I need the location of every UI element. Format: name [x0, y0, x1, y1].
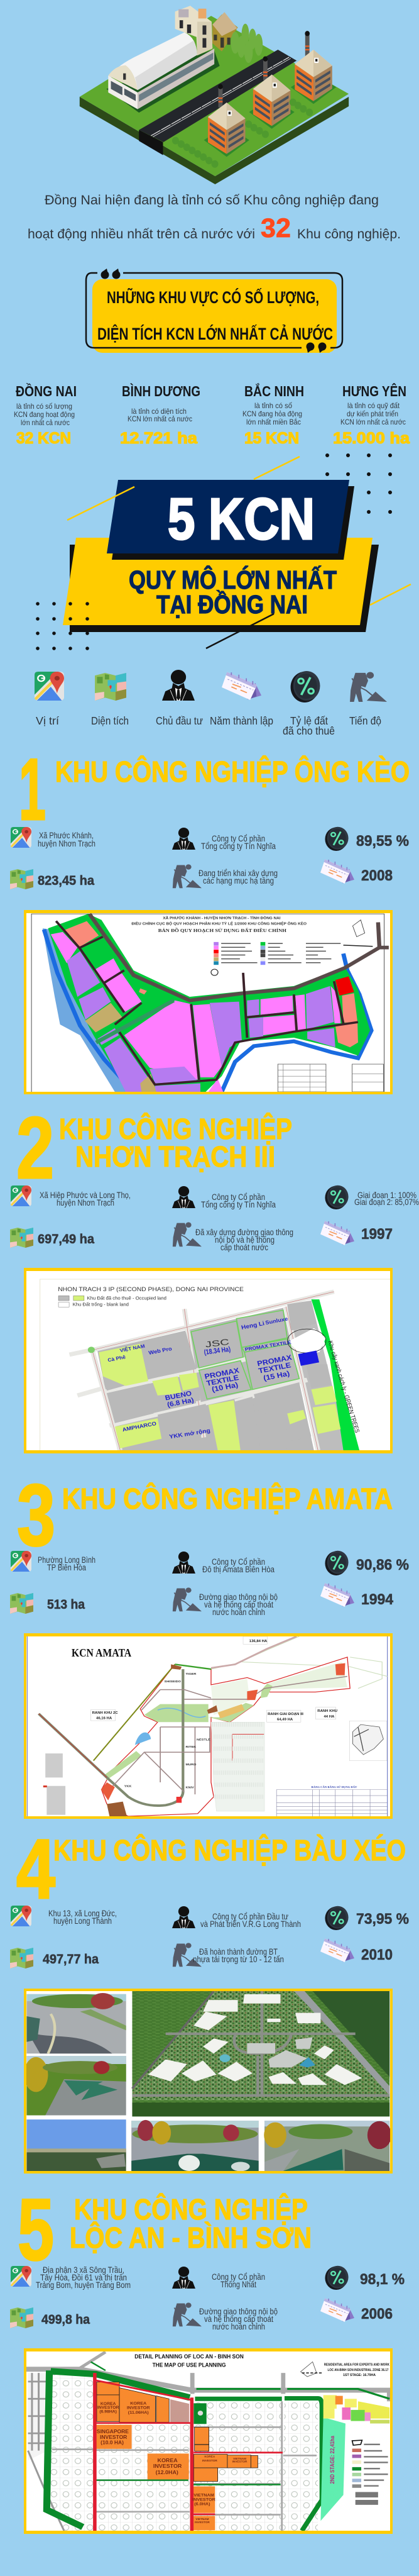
map: Nhơn Trạch 3 planning: Khu Đất đã cho thuê - Occupied land	[87, 1296, 166, 1301]
map: Amata planning	[24, 1633, 393, 1819]
section 2 heading	[16, 1099, 292, 1197]
section 2 heading: 2	[16, 1099, 54, 1197]
map: Lộc An - Bình Sơn planning: INVESTOR	[192, 2498, 215, 2502]
section 5 facts: Đường giao thông nội bộ	[199, 2307, 278, 2316]
stat: Hưng Yên: KCN lớn nhất cả nước	[340, 418, 406, 426]
stat: Bình Dương: là tỉnh có diện tích	[131, 407, 187, 416]
map: Nhơn Trạch 3 planning: PROMAX	[204, 1366, 240, 1381]
section 5 facts: Thống Nhất	[220, 2280, 256, 2289]
section 3 facts: 513 ha	[47, 1597, 85, 1612]
map: Amata planning: TIGER	[186, 1672, 197, 1676]
section 3 facts: và hệ thống cấp thoát	[204, 1600, 273, 1609]
map: Lộc An - Bình Sơn planning: DETAIL PLANNING OF LOC AN - BINH SON	[134, 2353, 244, 2360]
small renders	[24, 1993, 391, 2171]
map: Lộc An - Bình Sơn planning	[24, 2348, 393, 2534]
section 5 heading	[18, 2181, 312, 2279]
map: Lộc An - Bình Sơn planning: (11.06HA)	[128, 2411, 149, 2415]
section 2 facts: Đã xây dựng đường giao thông	[195, 1228, 293, 1237]
map: Nhơn Trạch 3 planning: (10 Ha)	[211, 1380, 239, 1394]
map: Nhơn Trạch 3 planning: PROMAX	[256, 1353, 293, 1368]
section 2 facts: Tổng công ty Tín Nghĩa	[201, 1200, 276, 1209]
section 3 heading	[17, 1467, 393, 1564]
intro text: Đồng Nai hiện đang là tỉnh có số Khu công nghiệp đang	[45, 193, 379, 208]
map: Amata planning: KNIV	[186, 1786, 194, 1789]
map: Amata planning: KCN AMATA	[72, 1647, 132, 1660]
map: Amata planning: RANH GIAI ĐOẠN III	[268, 1713, 303, 1716]
section 1 facts: 89,55 %	[356, 833, 409, 850]
section 2 facts: Công ty Cổ phần	[212, 1192, 265, 1202]
stat: Hưng Yên	[333, 382, 410, 447]
stat: Đồng Nai: KCN đang hoạt động	[14, 410, 75, 419]
legend: icons and labels: Chủ đầu tư	[156, 714, 203, 727]
map: Nhơn Trạch 3 planning: BUENO	[165, 1390, 193, 1402]
map: Amata planning: 44 HA	[324, 1715, 334, 1719]
section 5 facts: nước hoàn chỉnh	[212, 2322, 265, 2331]
section 3 heading: 3	[17, 1467, 55, 1564]
section 2 heading: NHƠN TRẠCH III	[75, 1140, 275, 1173]
map: Lộc An - Bình Sơn planning: (6.0HA)	[194, 2502, 210, 2507]
section 4 heading	[16, 1823, 406, 1916]
section 3 facts: Đô thị Amata Biên Hòa	[202, 1565, 275, 1574]
map: Lộc An - Bình Sơn planning: INVESTOR	[127, 2406, 150, 2411]
section 4 facts: Khu 13, xã Long Đức,	[48, 1909, 117, 1918]
map: Lộc An - Bình Sơn planning: VIETNAM	[233, 2457, 246, 2460]
section 3 facts: 90,86 %	[356, 1557, 409, 1574]
legend: icons and labels: Tiến độ	[349, 714, 381, 727]
map: Lộc An - Bình Sơn planning: 1ST STAGE: 16.79HA	[343, 2373, 376, 2377]
map: Lộc An - Bình Sơn planning: VIETNAM	[193, 2494, 214, 2497]
banner: 5 KCN quy mô lớn nhất: QUY MÔ LỚN NHẤT	[129, 565, 337, 594]
stat: Bắc Ninh: lớn nhất miền Bắc	[246, 417, 301, 426]
main aerial render	[132, 1991, 389, 2116]
map: Amata planning: YKK	[124, 1785, 132, 1789]
section 4 facts: huyện Long Thành	[53, 1916, 112, 1926]
map: Nhơn Trạch 3 planning: Khu cây xanh cách ly - GREEN TREES	[326, 1340, 361, 1434]
section 2 facts: huyện Nhơn Trạch	[57, 1198, 114, 1208]
map: Lộc An - Bình Sơn planning: (10.0 HA)	[101, 2440, 124, 2445]
section 2 facts: 1997	[361, 1226, 393, 1243]
map: Nhơn Trạch 3 planning: TEXTILE	[205, 1374, 239, 1387]
map: Lộc An - Bình Sơn planning: 2ND STAGE: 22,41ha	[329, 2435, 335, 2484]
section 2 facts: nội bộ và hệ thống	[215, 1235, 275, 1245]
section 4 heading: 4	[16, 1823, 55, 1916]
map: Nhơn Trạch 3 planning: Sunluxe	[264, 1316, 288, 1326]
map: Amata planning: BẢNG CÂN BẰNG SỬ DỤNG ĐẤT	[312, 1785, 357, 1789]
legend: icons and labels: Năm thành lập	[210, 714, 273, 727]
map: Lộc An - Bình Sơn planning: KOREA	[130, 2402, 146, 2406]
section 4 facts: và Phát triển V.R.G Long Thành	[200, 1919, 301, 1929]
map: Amata planning: RANH KHU	[317, 1709, 337, 1713]
callout: regions heading: DIỆN TÍCH KCN LỚN NHẤT CẢ NƯỚC	[97, 323, 333, 343]
map: Lộc An - Bình Sơn planning: INVESTOR	[232, 2460, 248, 2463]
stat: Hưng Yên: 15.000 ha	[333, 430, 410, 447]
section 1 facts: 823,45 ha	[38, 874, 94, 888]
section 1 facts: huyện Nhơn Trạch	[38, 839, 95, 848]
stat: Đồng Nai: ĐỒNG NAI	[16, 382, 77, 399]
map: Nhơn Trạch 3 planning: TEXTILE	[258, 1361, 291, 1375]
section 2 facts	[10, 1185, 419, 1252]
map: Nhơn Trạch 3 planning: VIỆT NAM	[119, 1343, 146, 1353]
intro text: Khu công nghiệp.	[297, 227, 401, 242]
section 3 facts: Phường Long Bình	[38, 1555, 95, 1565]
map: Nhơn Trạch 3 planning: (6.8 Ha)	[166, 1397, 195, 1409]
section 5 facts: 98,1 %	[360, 2271, 405, 2288]
map: Ông Kèo planning: BẢN ĐỒ QUY HOẠCH SỬ DỤNG ĐẤT ĐIỀU CHỈNH	[158, 928, 287, 933]
section 4 facts: Đã hoàn thành đường BT	[199, 1947, 278, 1957]
section 3 facts: Công ty Cổ phần	[212, 1557, 265, 1567]
stat: Đồng Nai: là tỉnh có số lượng	[16, 402, 72, 411]
section 5 facts: Công ty Cổ phần	[212, 2272, 265, 2282]
section 3 facts: TP Biên Hòa	[47, 1563, 86, 1572]
section 5 heading: 5	[18, 2181, 54, 2279]
section 3 facts	[10, 1551, 409, 1617]
stat: Bình Dương	[120, 382, 200, 447]
legend: icons and labels: Vị trí	[36, 714, 59, 727]
stat: Hưng Yên: dự kiến phát triển	[347, 409, 398, 418]
section 2 facts: cấp thoát nước	[220, 1243, 268, 1252]
section 5 facts: Địa phận 3 xã Sông Trầu,	[43, 2265, 124, 2275]
stat: Bắc Ninh: KCN đang hỏa động	[242, 409, 302, 418]
map: Amata planning: NESTLE	[197, 1738, 210, 1741]
section 1 facts	[10, 827, 409, 889]
section 1 facts: các hạng mục hạ tầng	[203, 876, 274, 886]
map: Nhơn Trạch 3 planning: Web Pro	[148, 1345, 173, 1356]
map: Nhơn Trạch 3 planning: Khu Đất trống - blank land	[73, 1302, 129, 1307]
section 5 facts: và hệ thống cấp thoát	[204, 2314, 273, 2324]
section 3 facts: Đường giao thông nội bộ	[199, 1592, 278, 1602]
stat: Đồng Nai	[14, 382, 77, 447]
section 5 facts: Trảng Bom, huyện Trảng Bom	[36, 2280, 131, 2290]
stat: Đồng Nai: 32 KCN	[16, 430, 71, 447]
map: Ông Kèo planning: XÃ PHƯỚC KHÁNH - HUYỆN NHƠN TRẠCH - TỈNH ĐỒNG NAI	[163, 916, 281, 920]
map: Amata planning: SHISEIDO	[165, 1680, 181, 1684]
section 4 facts: 497,77 ha	[43, 1952, 99, 1967]
section 4 facts: nhựa tải trọng từ 10 - 12 tấn	[193, 1955, 284, 1964]
stat: Bắc Ninh: BẮC NINH	[244, 382, 304, 399]
section 2 facts: 697,49 ha	[38, 1232, 94, 1246]
map: Amata planning: MURO	[186, 1763, 196, 1767]
intro text: 32	[261, 213, 291, 243]
section 4 facts: 73,95 %	[356, 1911, 409, 1928]
stat: Hưng Yên: là tỉnh có quỹ đất	[347, 401, 400, 410]
section 1 facts: Xã Phước Khánh,	[39, 831, 94, 840]
section 5 heading: KHU CÔNG NGHIỆP	[74, 2193, 308, 2226]
section 5 heading: LỘC AN - BÌNH SƠN	[70, 2221, 312, 2254]
map: Lộc An - Bình Sơn planning: INVESTOR	[153, 2463, 182, 2469]
legend: icons and labels: Diện tích	[91, 714, 129, 727]
banner: 5 KCN quy mô lớn nhất: 5 KCN	[168, 486, 315, 552]
section 1 facts: Tổng công ty Tín Nghĩa	[201, 841, 276, 851]
map: Nhơn Trạch 3 planning: PROMAX TEXTILE	[244, 1340, 292, 1352]
map: Lộc An - Bình Sơn planning: (12.0HA)	[156, 2469, 178, 2475]
legend: icons and labels: đã cho thuê	[283, 724, 335, 737]
map: Amata planning: RANH KHU 2C	[92, 1711, 118, 1715]
legend: icons and labels: Tỷ lệ đất	[290, 714, 328, 727]
map: Lộc An - Bình Sơn planning: SINGAPORE	[97, 2429, 129, 2434]
section 3 facts: nước hoàn chỉnh	[212, 1607, 265, 1617]
map: Lộc An - Bình Sơn planning: THE MAP OF USE PLANNING	[153, 2362, 226, 2368]
section 4 facts: 2010	[361, 1946, 393, 1963]
stat: Bình Dương: 12.721 ha	[120, 430, 198, 447]
map: Lộc An - Bình Sơn planning: INVESTOR	[97, 2406, 119, 2410]
section 1 heading	[19, 741, 410, 838]
map: Nhơn Trạch 3 planning: NHON TRACH 3 IP (SECOND PHASE), DONG NAI PROVINCE	[58, 1287, 244, 1293]
map: Lộc An - Bình Sơn planning: (6.98HA)	[99, 2410, 117, 2414]
banner: 5 KCN quy mô lớn nhất	[36, 453, 411, 650]
stat: Bắc Ninh: là tỉnh có số	[254, 401, 292, 410]
illustration: isometric industrial park	[80, 6, 349, 184]
callout: regions heading	[86, 269, 342, 353]
map: Lộc An - Bình Sơn planning: KOREA	[158, 2457, 178, 2463]
stat: Đồng Nai: lớn nhất cả nước	[21, 418, 70, 427]
map: Ông Kèo planning	[24, 910, 393, 1097]
map: Lộc An - Bình Sơn planning: VIETNAM	[195, 2518, 209, 2521]
intro text	[28, 193, 401, 243]
section 4 facts	[10, 1906, 409, 1968]
map: Amata planning: 136,84 HA	[249, 1640, 267, 1643]
map: Nhơn Trạch 3 planning: JSC	[205, 1337, 230, 1349]
section 3 facts: 1994	[361, 1591, 394, 1608]
stat: Bắc Ninh	[242, 382, 304, 447]
map: Amata planning: 46,16 HA	[96, 1717, 112, 1720]
section 1 facts: Công ty Cổ phần	[212, 834, 265, 843]
map: Lộc An - Bình Sơn planning: KOREA	[101, 2402, 116, 2406]
map: Nhơn Trạch 3 planning: (15 Ha)	[263, 1369, 290, 1382]
stat: Bình Dương: KCN lớn nhất cả nước	[128, 414, 192, 423]
map: Nhơn Trạch 3 planning: Heng Li	[241, 1320, 265, 1331]
section 1 facts: Đang triển khai xây dựng	[199, 869, 278, 878]
stat: Hưng Yên: HƯNG YÊN	[342, 382, 406, 399]
stat: Bình Dương: BÌNH DƯƠNG	[122, 382, 200, 399]
section 2 heading: KHU CÔNG NGHIỆP	[59, 1113, 292, 1145]
section 2 facts: Xã Hiệp Phước và Long Thọ,	[40, 1191, 131, 1200]
map: Lộc An - Bình Sơn planning: INVESTOR	[100, 2434, 127, 2440]
map: Nhơn Trạch 3 planning: YKK mở rộng	[169, 1428, 211, 1440]
callout: regions heading: NHỮNG KHU VỰC CÓ SỐ LƯỢNG,	[107, 287, 319, 307]
section 1 facts: 2008	[361, 867, 393, 884]
map: Nhơn Trạch 3 planning: (18.34 Ha)	[204, 1345, 231, 1357]
map: Amata planning: 64,49 HA	[277, 1718, 293, 1722]
banner: 5 KCN quy mô lớn nhất: TẠI ĐỒNG NAI	[156, 590, 308, 619]
map: Nhơn Trạch 3 planning: AMPHARCO	[122, 1421, 157, 1433]
section 1 heading: 1	[19, 741, 46, 838]
intro text: hoạt động nhiều nhất trên cả nước với	[28, 227, 255, 242]
map: Amata planning: RITEK	[186, 1745, 196, 1749]
section 5 facts: 499,8 ha	[41, 2312, 90, 2327]
map: Ông Kèo planning: ĐIỀU CHỈNH CỤC BỘ QUY HOẠCH PHÂN KHU TỶ LỆ 1/2000 KHU CÔNG NGHIỆP ÔNG KÈO	[131, 921, 307, 926]
section 4 facts: Công ty Cổ phần Đầu tư	[212, 1912, 288, 1921]
photo collage: Bàu Xéo renders	[24, 1989, 393, 2174]
section 5 facts: Tây Hòa, Đồi 61 và thị trấn	[40, 2273, 127, 2282]
map: Nhơn Trạch 3 planning: Cà Phê	[107, 1354, 126, 1363]
section 5 facts	[10, 2265, 405, 2331]
legend: icons and labels	[35, 670, 387, 737]
section 5 facts: 2006	[361, 2306, 393, 2323]
stat: Bắc Ninh: 15 KCN	[244, 430, 299, 447]
map: Lộc An - Bình Sơn planning: INVESTOR	[195, 2521, 210, 2524]
map: Nhơn Trạch 3 planning	[24, 1268, 393, 1453]
map: Lộc An - Bình Sơn planning: INVESTOR	[202, 2459, 218, 2462]
map: Lộc An - Bình Sơn planning: KOREA	[204, 2455, 215, 2458]
